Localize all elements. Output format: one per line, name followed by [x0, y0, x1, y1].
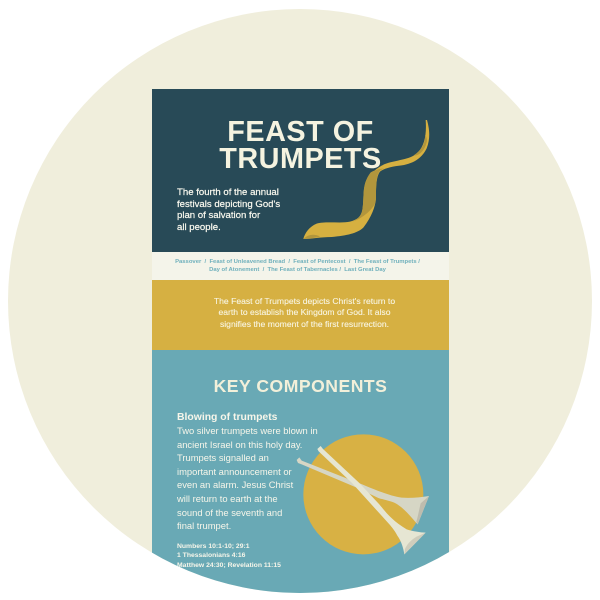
summary text	[214, 296, 395, 329]
summary text: The Feast of Trumpets depicts Christ's return to	[214, 296, 395, 306]
body text: ancient Israel on this holy day.	[177, 439, 302, 450]
intro text: festivals depicting God's	[177, 199, 280, 210]
subheading: Blowing of trumpets	[177, 412, 277, 423]
body text: Trumpets signalled an	[177, 452, 269, 463]
panel: key components	[152, 350, 449, 600]
intro text	[177, 187, 280, 233]
body text: Two silver trumpets were blown in	[177, 425, 318, 436]
body text	[177, 425, 318, 531]
body text: important announcement or	[177, 466, 292, 477]
intro text: The fourth of the annual	[177, 187, 279, 198]
scripture references: 1 Thessalonians 4:16	[177, 552, 245, 559]
title	[219, 116, 382, 175]
scripture references	[177, 543, 281, 569]
scripture references: Matthew 24:30; Revelation 11:15	[177, 562, 281, 569]
summary text: earth to establish the Kingdom of God. It also	[218, 307, 390, 317]
title: TRUMPETS	[219, 143, 382, 175]
body text: final trumpet.	[177, 520, 231, 531]
festival list: Passover / Feast of Unleavened Bread / Feast of Pentecost / The Feast of Trumpets /	[175, 259, 420, 265]
title: FEAST OF	[227, 116, 374, 148]
festival navigation strip	[152, 252, 449, 280]
festival list: Day of Atonement / The Feast of Tabernacles / Last Great Day	[209, 267, 386, 273]
body text: will return to earth at the	[177, 493, 278, 504]
panel: summary	[152, 280, 449, 350]
festival list	[175, 259, 420, 273]
icon: shofar horn	[303, 120, 430, 239]
body text: even an alarm. Jesus Christ	[177, 479, 293, 490]
infographic panel	[152, 89, 449, 593]
body text: sound of the seventh and	[177, 507, 282, 518]
scripture references: Numbers 10:1-10; 29:1	[177, 543, 250, 550]
intro text: all people.	[177, 222, 221, 233]
heading: key components: KEY COMPONENTS	[214, 376, 387, 396]
icon: gold circle with silver trumpets	[296, 434, 429, 554]
intro text: plan of salvation for	[177, 210, 260, 221]
panel: title header	[152, 89, 449, 252]
summary text: signifies the moment of the first resurrection.	[220, 319, 389, 329]
